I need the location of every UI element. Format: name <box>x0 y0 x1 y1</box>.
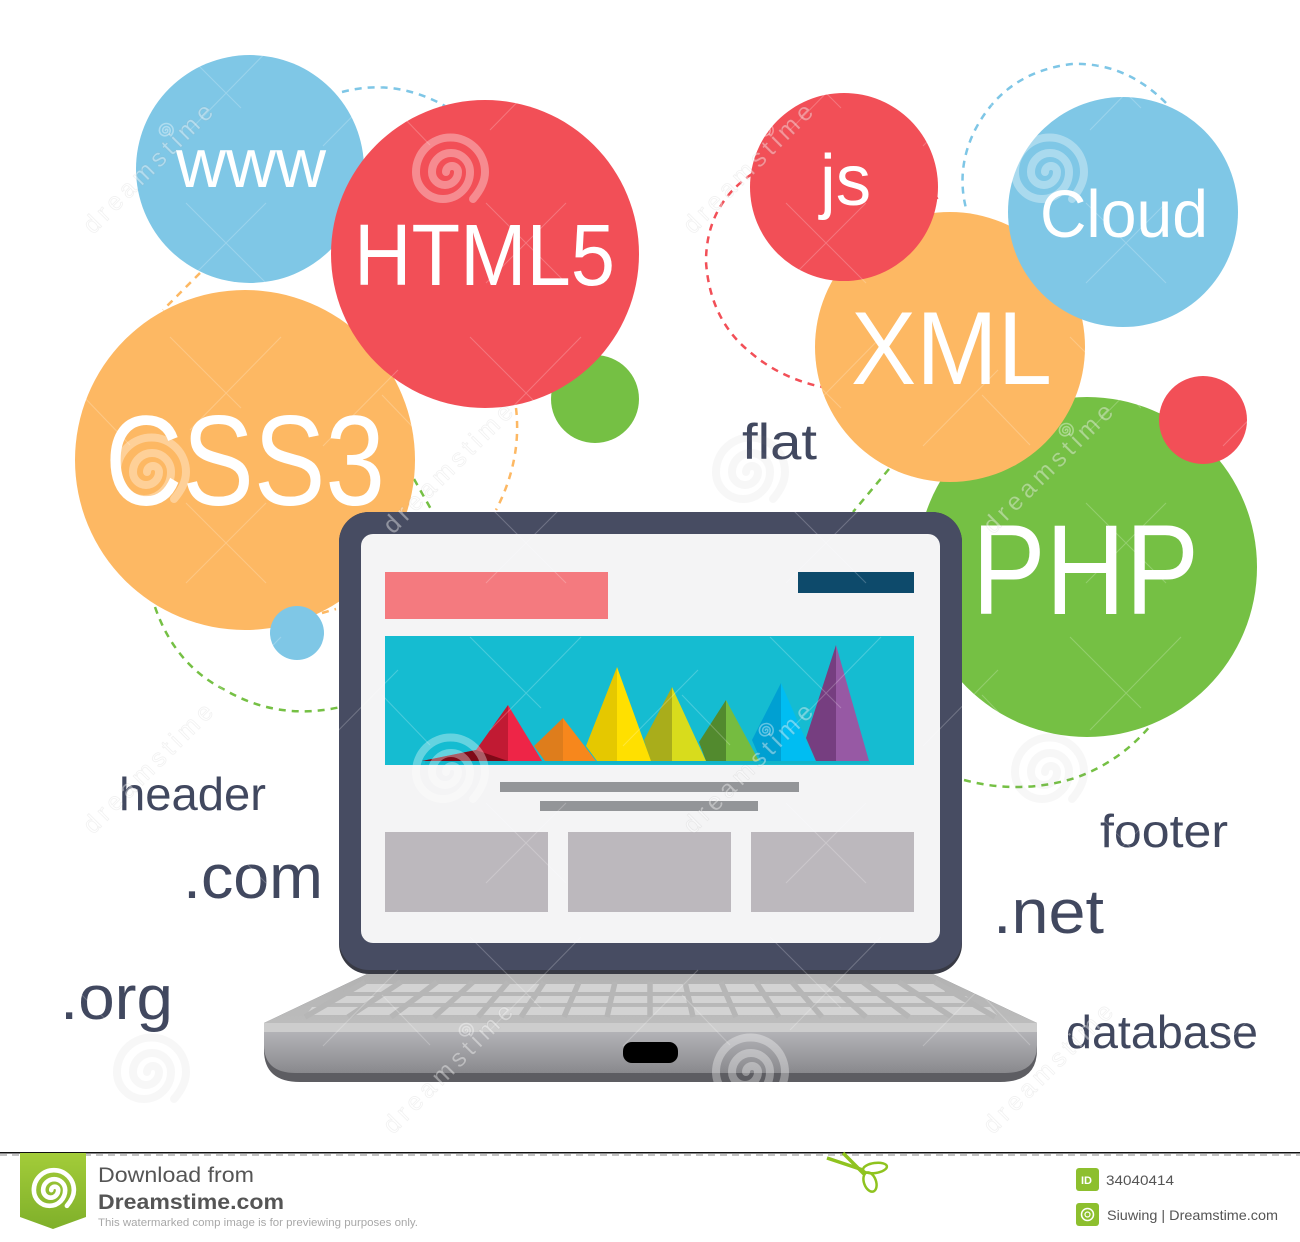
watermark overlay: dreamstime <box>677 698 819 839</box>
dashed ring: green right <box>853 469 1151 787</box>
laptop base <box>264 974 1037 1082</box>
hero banner with pyramid chart <box>385 636 914 765</box>
word: database: database <box>1066 1006 1258 1058</box>
bubble: PHP: PHP <box>972 499 1199 642</box>
dot: blue small <box>270 606 324 660</box>
bubble: js: js <box>818 141 871 221</box>
dashed ring: green left <box>155 479 432 711</box>
word: .com: .com <box>183 843 323 912</box>
pyramid: blue <box>752 683 815 761</box>
dashed ring: red right <box>706 174 940 387</box>
scissors icon <box>827 1153 888 1193</box>
watermark overlay: dreamstime <box>377 398 519 539</box>
dashed ring: blue right <box>962 64 1166 212</box>
dot: red small <box>1159 376 1247 464</box>
bubble: Cloud: Cloud <box>1040 177 1208 252</box>
bubble: Cloud <box>1008 97 1238 327</box>
bubble: CSS3 <box>75 290 415 630</box>
laptop screen <box>361 534 940 943</box>
text lines <box>500 782 799 811</box>
bubble: PHP <box>917 397 1257 737</box>
word: .org: .org <box>60 964 173 1033</box>
footer download text: This watermarked comp image is for previewing purposes only. <box>98 1217 418 1229</box>
footer download text: Download from <box>98 1164 254 1187</box>
cut line <box>0 1152 1300 1155</box>
image ID <box>1076 1168 1174 1191</box>
word: flat: flat <box>742 414 817 470</box>
bubble: www <box>136 55 364 283</box>
bubble: XML: XML <box>851 291 1052 407</box>
copyright credit <box>1076 1203 1278 1226</box>
watermark overlay: dreamstime <box>677 98 819 239</box>
pyramid: lime <box>644 687 706 761</box>
laptop lid <box>339 512 962 974</box>
dot: green small <box>551 355 639 443</box>
pyramid: red <box>422 705 542 761</box>
page nav bar <box>798 572 914 593</box>
bubble: js <box>750 93 938 281</box>
bubble: XML <box>815 212 1085 482</box>
word: header: header <box>119 768 266 820</box>
word: .net: .net <box>993 878 1104 947</box>
bubble: HTML5: HTML5 <box>354 207 615 304</box>
dashed ring: orange left <box>163 273 517 613</box>
image ID: ID <box>1081 1175 1092 1187</box>
word: footer: footer <box>1100 805 1228 857</box>
badge: Dreamstime logo <box>20 1153 86 1229</box>
image ID: 34040414 <box>1106 1172 1174 1188</box>
laptop <box>264 512 1037 1082</box>
watermark overlay: dreamstime <box>77 98 219 239</box>
copyright credit: Siuwing | Dreamstime.com <box>1107 1207 1278 1223</box>
pyramid: yellow <box>586 667 651 761</box>
pyramid: green <box>699 700 759 761</box>
watermark overlay: dreamstime <box>77 698 219 839</box>
bubble: www: www <box>175 124 326 202</box>
bubble: CSS3: CSS3 <box>105 390 385 533</box>
footer download text <box>98 1164 418 1229</box>
trackpad notch <box>623 1042 678 1063</box>
bubble: HTML5 <box>331 100 639 408</box>
dashed ring: blue left <box>342 87 445 106</box>
pyramid: purple <box>806 645 869 761</box>
footer download text: Dreamstime.com <box>98 1191 284 1214</box>
page logo bar <box>385 572 608 619</box>
content blocks <box>385 832 914 912</box>
pyramid: orange <box>534 718 596 761</box>
watermark overlay: dreamstime <box>977 398 1119 539</box>
watermark overlay: dreamstime <box>977 998 1119 1139</box>
watermark overlay: dreamstime <box>377 998 519 1139</box>
